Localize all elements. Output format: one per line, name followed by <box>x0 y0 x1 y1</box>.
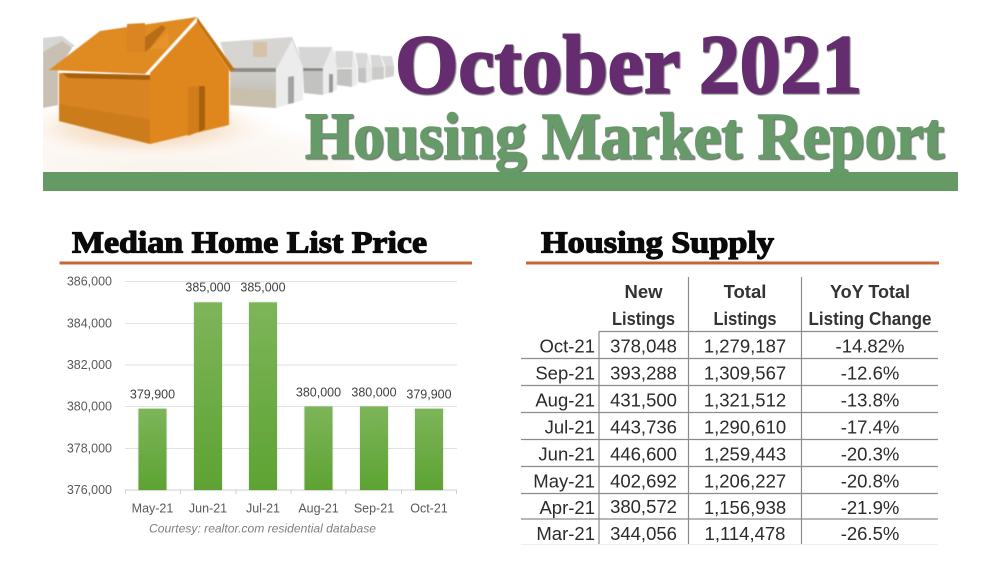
row: Aug-21 <box>535 390 899 410</box>
row: Mar-21: 1,114,478 <box>705 523 785 544</box>
y axis labels: 384,000 <box>67 316 112 330</box>
green banner bar <box>43 172 958 191</box>
x axis labels <box>132 502 448 516</box>
x axis labels: May-21 <box>132 502 173 516</box>
y axis labels: 382,000 <box>67 358 112 372</box>
row: Jun-21 <box>538 444 899 464</box>
row: Jul-21: 443,736 <box>610 416 677 438</box>
row: Aug-21: 1,321,512 <box>704 390 786 410</box>
row: Sep-21: 1,309,567 <box>704 362 786 384</box>
icon: orange house <box>49 17 235 144</box>
row: Mar-21: 344,056 <box>610 523 677 544</box>
row: Jul-21: 1,290,610 <box>704 416 786 438</box>
subtitle: Housing Market Report: Housing Market Report <box>305 100 944 173</box>
data labels: 380,000 <box>296 386 341 400</box>
row: Aug-21: Aug-21 <box>535 390 595 410</box>
row: Apr-21 <box>539 496 899 518</box>
row: May-21: 1,206,227 <box>704 470 786 492</box>
table header: Listings <box>612 308 675 329</box>
heading: Median Home List Price: Median Home List Price <box>72 224 427 260</box>
row: Jul-21 <box>545 416 899 438</box>
row: Sep-21 <box>535 362 899 384</box>
icon: row of grey houses <box>43 36 394 108</box>
row: Sep-21: -12.6% <box>841 362 899 384</box>
row: Jun-21: Jun-21 <box>538 444 595 464</box>
house shadow glow <box>43 110 257 151</box>
chart source note: Courtesy: realtor.com residential database <box>149 522 376 536</box>
table header: Listing Change <box>808 308 932 329</box>
bars <box>138 302 443 490</box>
table header: Listings <box>714 308 776 329</box>
header banner <box>43 16 394 172</box>
x axis labels: Jun-21 <box>189 502 227 516</box>
data labels: 385,000 <box>240 280 286 294</box>
row: Oct-21 <box>539 336 904 356</box>
row: Jun-21: 1,259,443 <box>704 444 786 464</box>
row: May-21: May-21 <box>533 470 595 492</box>
row: May-21 <box>533 470 899 492</box>
row: Oct-21: -14.82% <box>836 336 904 356</box>
table header <box>612 281 932 329</box>
row: Oct-21: Oct-21 <box>539 336 595 356</box>
y axis labels: 378,000 <box>67 442 112 456</box>
row: Jun-21: -20.3% <box>841 444 899 464</box>
data labels <box>130 280 452 402</box>
row: Sep-21: 393,288 <box>610 362 677 384</box>
row: May-21: 402,692 <box>610 470 677 492</box>
row: Apr-21: -21.9% <box>841 497 899 518</box>
table: housing supply <box>521 277 938 545</box>
row: Mar-21: -26.5% <box>841 523 899 544</box>
x axis labels: Jul-21 <box>246 502 280 516</box>
heading: Housing Supply: Housing Supply <box>541 224 775 260</box>
row: Mar-21: Mar-21 <box>536 523 595 544</box>
row: Aug-21: 431,500 <box>610 390 677 410</box>
heading rule: right <box>526 262 939 264</box>
row: Apr-21: Apr-21 <box>539 497 595 518</box>
data labels: 379,900 <box>130 388 175 402</box>
row: Mar-21 <box>536 523 899 544</box>
row: Sep-21: Sep-21 <box>535 362 595 384</box>
row: Jul-21: -17.4% <box>841 416 899 438</box>
data labels: 385,000 <box>185 280 231 294</box>
row: Apr-21: 1,156,938 <box>704 497 786 518</box>
table header: New <box>624 281 663 302</box>
data labels: 379,900 <box>406 388 452 402</box>
row: Aug-21: -13.8% <box>841 390 899 410</box>
x axis labels: Aug-21 <box>298 502 339 516</box>
row: Apr-21: 380,572 <box>610 496 677 517</box>
y axis labels: 386,000 <box>67 274 112 288</box>
table header: YoY Total <box>830 281 910 302</box>
data labels: 380,000 <box>351 386 397 400</box>
y axis labels <box>67 274 112 497</box>
bar chart: median home list price <box>67 274 457 516</box>
y axis labels: 380,000 <box>67 400 112 414</box>
x axis labels: Sep-21 <box>354 502 394 516</box>
row: Oct-21: 1,279,187 <box>704 336 786 356</box>
y axis labels: 376,000 <box>67 483 112 497</box>
row: May-21: -20.8% <box>841 470 899 492</box>
x axis labels: Oct-21 <box>410 502 448 516</box>
row: Jul-21: Jul-21 <box>545 416 595 438</box>
row: Jun-21: 446,600 <box>610 444 677 464</box>
table header: Total <box>724 281 766 302</box>
heading rule: left <box>60 262 472 264</box>
title: October 2021: October 2021 <box>395 18 862 112</box>
row: Oct-21: 378,048 <box>610 336 677 356</box>
